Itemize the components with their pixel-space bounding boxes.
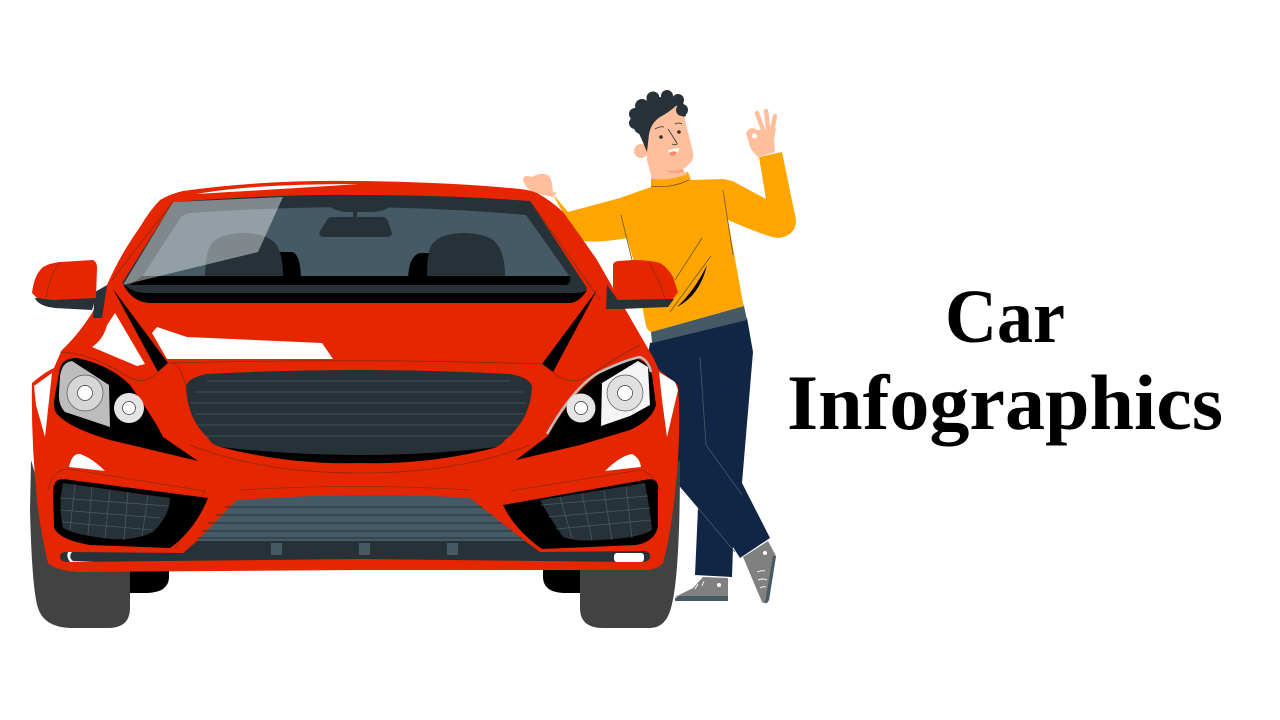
man neck and head: [629, 90, 693, 179]
left marker highlight: [69, 454, 105, 471]
man hand OK sign: [746, 111, 776, 157]
car: [30, 181, 680, 628]
right headlight: [516, 357, 656, 460]
title: [787, 275, 1223, 446]
title line: Car: Car: [945, 275, 1065, 359]
car body: [32, 181, 679, 572]
car seats: [262, 252, 301, 282]
man hair: [629, 90, 688, 152]
car wheels: [30, 460, 680, 628]
left fog lamp: [53, 454, 208, 548]
bumper creases: [48, 445, 660, 549]
left fender highlight: [92, 313, 145, 366]
black dashboard strips: [130, 276, 570, 285]
right side mirror: [606, 260, 678, 309]
man trousers: [640, 318, 770, 577]
man resting fist: [523, 174, 557, 197]
windscreen reflection: [123, 197, 283, 285]
man waistband: [651, 306, 747, 343]
rear view mirror: [319, 217, 392, 237]
bumper strip with lights: [60, 541, 650, 562]
car side highlights: [34, 372, 678, 437]
man leaning on car: [523, 90, 796, 603]
hood highlight: [152, 327, 333, 359]
car windscreen: [123, 195, 587, 303]
car roof highlight: [196, 184, 358, 194]
left headlight: [54, 358, 198, 461]
right marker highlight: [605, 454, 641, 471]
right fog lamp: [503, 454, 658, 549]
hood creases: [113, 289, 168, 372]
front grille: [186, 370, 532, 463]
left side mirror: [32, 260, 107, 318]
title line: Infographics: Infographics: [787, 359, 1223, 446]
man shoes: [675, 541, 776, 603]
man sweater: [552, 152, 796, 332]
lower grille: [197, 495, 525, 541]
